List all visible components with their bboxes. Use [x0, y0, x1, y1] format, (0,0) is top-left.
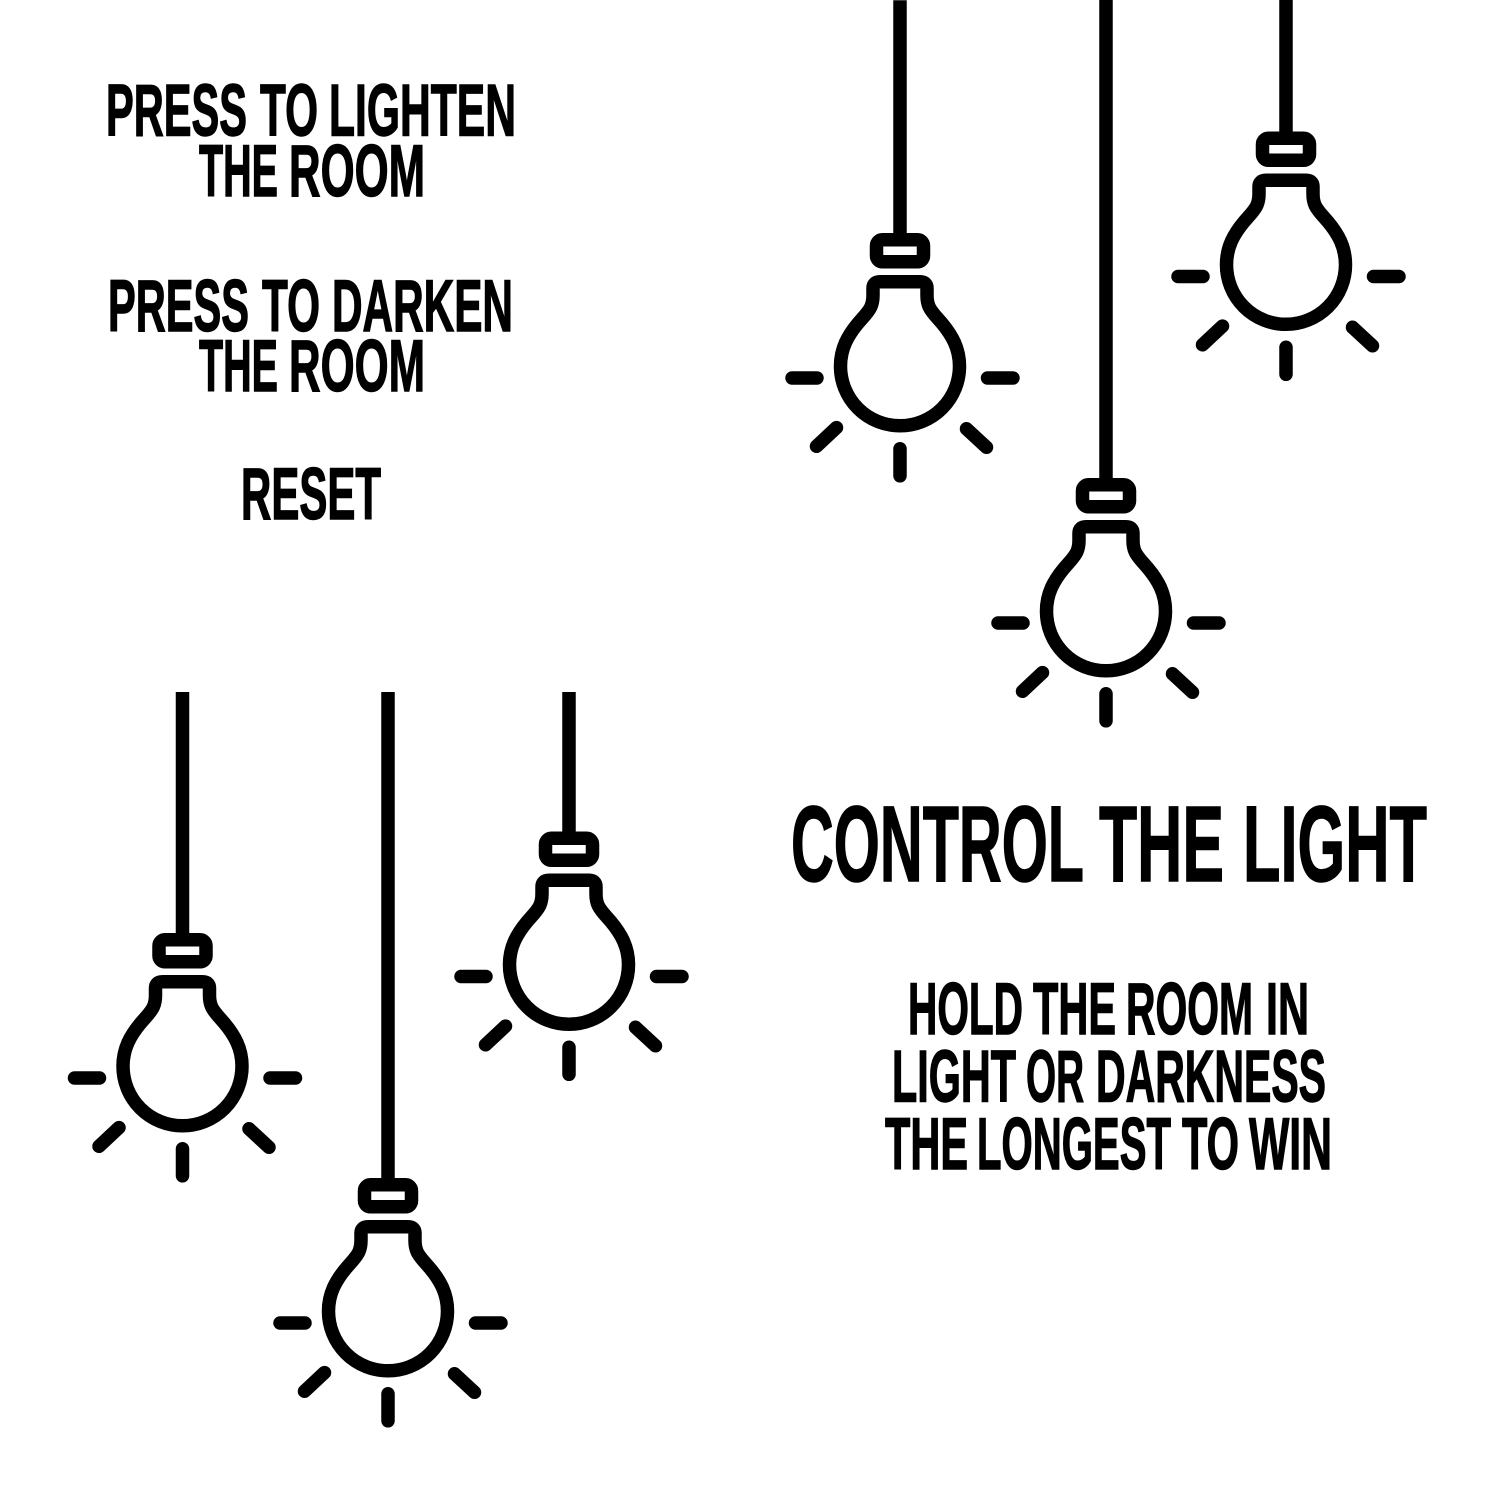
objective text block [885, 969, 1332, 1185]
instruction: press to lighten: LIGHTEN [329, 70, 516, 152]
instruction: press to lighten: TO [260, 70, 318, 152]
instructions text block [106, 70, 516, 535]
instruction: press to darken: TO [262, 266, 320, 347]
icon: hanging bulb bottom left [74, 692, 296, 1176]
objective text block: IN [1266, 969, 1309, 1050]
icon: hanging bulb top right [1178, 0, 1399, 374]
instruction: press to darken: DARKEN [332, 266, 513, 347]
icon: hanging bulb top left [792, 0, 1013, 476]
objective text block: DARKNESS [1096, 1036, 1326, 1118]
objective text block: THE [885, 1104, 968, 1185]
icon: hanging bulb bottom middle [280, 692, 501, 1421]
objective text block: OR [1026, 1036, 1084, 1118]
objective text block: HOLD [908, 969, 1023, 1050]
instruction: press to lighten: ROOM [289, 131, 425, 212]
instruction: press to lighten: PRESS [106, 70, 247, 152]
instruction: press to darken: THE [199, 326, 278, 407]
objective text block: LONGEST [977, 1104, 1171, 1185]
instruction: press to darken: ROOM [289, 326, 425, 407]
icon: hanging bulb bottom right [461, 692, 682, 1074]
icon: hanging bulb top middle [998, 0, 1219, 721]
objective text block: TO [1182, 1104, 1239, 1185]
instruction: press to lighten: THE [199, 131, 278, 212]
instruction: press to darken [108, 266, 513, 407]
instruction: reset: RESET [241, 454, 381, 535]
instruction: press to lighten [106, 70, 516, 212]
title: CONTROL [791, 783, 1084, 904]
objective text block: WIN [1249, 1104, 1332, 1185]
objective text block: ROOM [1126, 969, 1253, 1050]
title: THE [1099, 783, 1224, 904]
objective text block: THE [1033, 969, 1116, 1050]
instruction: press to darken: PRESS [108, 266, 249, 347]
objective text block: LIGHT [892, 1036, 1016, 1118]
